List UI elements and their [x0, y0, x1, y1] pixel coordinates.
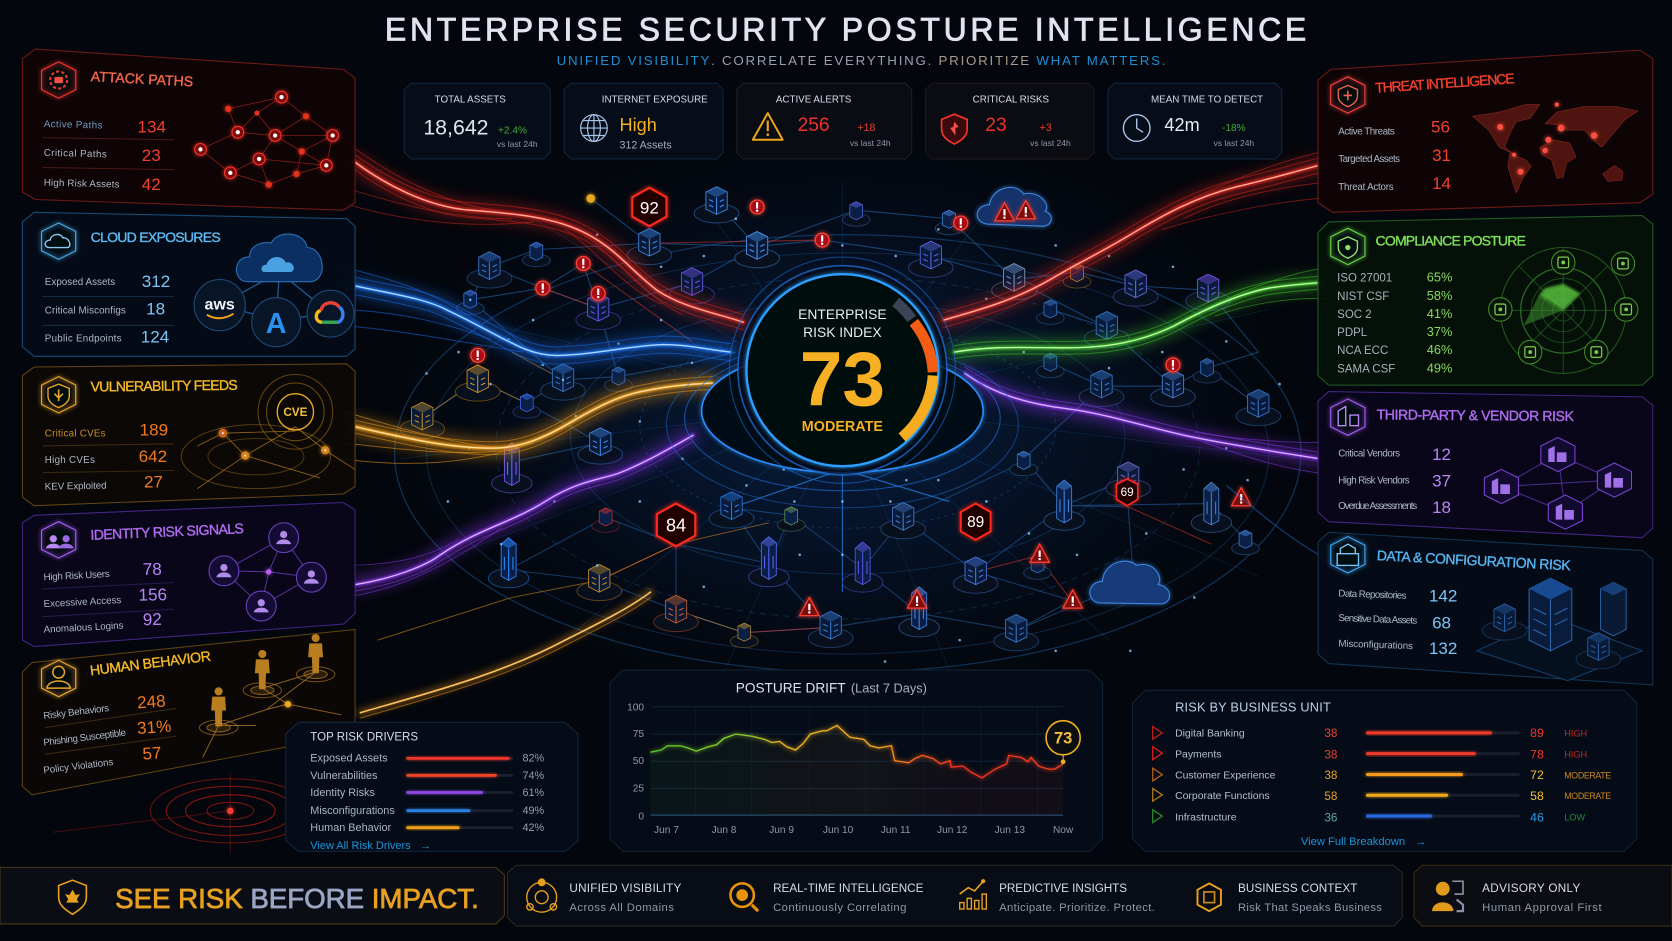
metrics: Threat Actors: [1338, 182, 1394, 193]
compliance rows: PDPL: [1337, 327, 1368, 339]
score 92: 92: [640, 198, 659, 217]
capability: predictive insights: PREDICTIVE INSIGHTS: [999, 882, 1127, 895]
risk score hexagons: [632, 188, 1138, 546]
KPI: total assets: 18,642: [423, 115, 489, 139]
grid: [650, 706, 1063, 815]
metrics: 31%: [137, 717, 172, 738]
icon: shield: [1331, 228, 1365, 265]
row: customer experience: MODERATE: [1564, 770, 1611, 780]
network platform rings: [395, 181, 1301, 672]
capability: predictive insights: [960, 879, 1155, 914]
icon: users: [42, 522, 76, 558]
row: infrastructure: Infrastructure: [1175, 812, 1237, 823]
panel: posture drift chart: [610, 670, 1103, 851]
y axis labels: 100: [627, 703, 644, 714]
x axis labels: Jun 11: [881, 825, 911, 836]
row: digital banking: HIGH: [1564, 729, 1587, 739]
row: infrastructure: [1153, 810, 1586, 825]
slogan: SEE RISK BEFORE IMPACT.: [115, 883, 479, 914]
x axis labels: [654, 825, 1074, 836]
metrics: Policy Violations: [43, 757, 114, 776]
metrics: 37: [1432, 471, 1451, 491]
human behavior stream connector: [360, 592, 650, 718]
icon: main cloud: [236, 234, 322, 282]
x axis labels: Jun 13: [995, 825, 1025, 836]
metrics: High Risk Vendors: [1338, 475, 1410, 486]
capability: unified visibility: [527, 879, 682, 914]
x axis labels: Jun 10: [823, 825, 854, 836]
KPI: mean time to detect: vs last 24h: [1213, 138, 1254, 148]
metrics: High CVEs: [45, 455, 95, 466]
icon: azure: A: [266, 308, 287, 340]
row: digital banking: Digital Banking: [1175, 729, 1245, 740]
CVE radar graphic: [181, 374, 355, 489]
icon: attack target: [42, 62, 76, 98]
user node: [246, 591, 276, 621]
x axis labels: Jun 12: [937, 825, 968, 836]
y axis labels: 25: [633, 784, 644, 795]
metrics: 42: [142, 175, 161, 194]
icon: aws: [194, 280, 245, 331]
row: vulnerabilities: 74%: [523, 770, 545, 782]
capability: unified visibility: Across All Domains: [569, 902, 674, 914]
KPI: active alerts: 256: [798, 115, 830, 136]
row: payments: Payments: [1175, 749, 1222, 760]
faint blue data connector: [1226, 485, 1319, 555]
radar chart: [1489, 248, 1638, 373]
compliance rows: 41%: [1427, 306, 1452, 321]
compliance rows: SAMA CSF: [1337, 363, 1395, 375]
score 89: 89: [967, 514, 984, 531]
row: payments: 78: [1530, 748, 1544, 762]
metrics: [43, 691, 176, 776]
panel: compliance posture: [1318, 216, 1653, 385]
y axis labels: [627, 703, 644, 822]
row: corporate functions: 58: [1324, 790, 1338, 803]
metrics: 18: [146, 300, 165, 319]
row: payments: [1153, 747, 1587, 762]
score 92: [632, 188, 666, 226]
metrics: Risky Behaviors: [43, 703, 110, 722]
row: exposed assets: 82%: [523, 753, 545, 765]
central glow: [341, 96, 1344, 736]
row: payments: HIGH: [1564, 749, 1587, 759]
current score marker: 73: [1054, 729, 1072, 748]
row: human behavior: 42%: [523, 822, 545, 834]
heading: ATTACK PATHS: [90, 68, 194, 89]
KPI: mean time to detect: [1108, 83, 1282, 159]
KPI: total assets: [404, 83, 550, 159]
red radar floor graphic: [53, 773, 310, 854]
score 69: [1116, 479, 1138, 506]
metrics: Public Endpoints: [45, 333, 122, 344]
metrics: 78: [143, 560, 162, 579]
row: customer experience: 38: [1324, 769, 1338, 782]
metrics: 12: [1432, 445, 1451, 464]
metrics: [43, 272, 174, 346]
KPI: internet exposure: 312 Assets: [620, 139, 672, 151]
compliance rows: 65%: [1427, 270, 1452, 285]
metrics: 132: [1429, 639, 1457, 658]
KPI: total assets: vs last 24h: [497, 139, 538, 149]
capability: business context: Risk That Speaks Business: [1238, 902, 1382, 914]
icon: warning triangle: [753, 113, 783, 140]
green stream connector: [954, 267, 1333, 358]
metrics: Sensitive Data Assets: [1338, 613, 1417, 627]
compliance rows: 49%: [1427, 360, 1452, 375]
central risk index gauge: RISK INDEX: [803, 324, 882, 340]
compliance rows: 46%: [1427, 342, 1452, 357]
row: misconfigurations: [310, 805, 545, 817]
metrics: [43, 560, 174, 636]
gauge amber segment: [902, 376, 933, 437]
capability: business context: [1197, 882, 1382, 914]
heading: COMPLIANCE POSTURE: [1376, 232, 1526, 248]
y axis labels: 0: [638, 811, 644, 822]
row: corporate functions: 58: [1530, 789, 1544, 803]
row: misconfigurations: 49%: [523, 805, 545, 817]
row: infrastructure: 36: [1324, 812, 1337, 825]
link: View Full Breakdown: [1301, 836, 1405, 848]
row: corporate functions: Corporate Functions: [1175, 791, 1270, 802]
row: customer experience: 72: [1530, 768, 1544, 782]
identity graph: [209, 523, 326, 621]
subtitle: UNIFIED VISIBILITY. CORRELATE EVERYTHING. PRIORITIZE WHAT MATTERS.: [557, 53, 1165, 68]
attack network graph: [195, 91, 339, 188]
world map: [1473, 102, 1638, 193]
KPI: critical risks: +3: [1040, 122, 1052, 134]
metrics: High Risk Users: [43, 569, 110, 583]
figures graph: [199, 634, 341, 757]
metrics: 31: [1432, 146, 1451, 165]
gauge heading: ENTERPRISE: [798, 306, 887, 322]
icon: aws: aws: [205, 296, 235, 313]
row: identity risks: Identity Risks: [310, 787, 375, 799]
metrics: 68: [1432, 613, 1451, 632]
x axis labels: Jun 9: [769, 825, 794, 836]
row: identity risks: [310, 787, 545, 799]
KPI: internet exposure: INTERNET EXPOSURE: [602, 94, 708, 105]
panel: cloud exposures: [22, 212, 355, 356]
panel: human behavior: [22, 629, 355, 795]
metrics: 642: [139, 447, 167, 466]
metrics: Overdue Assessments: [1338, 501, 1417, 512]
network nodes: [400, 187, 1281, 651]
heading: DATA & CONFIGURATION RISK: [1376, 547, 1572, 573]
row: corporate functions: MODERATE: [1564, 791, 1611, 801]
vendor graph: [1484, 437, 1631, 529]
icon: unified: [527, 879, 557, 912]
link: →: [420, 840, 431, 852]
score 84: [657, 504, 695, 546]
gauge value: 73: [800, 336, 885, 422]
gauge status: MODERATE: [802, 419, 883, 435]
icon: magnifier: [730, 883, 758, 911]
bottom advisory panel: [1414, 865, 1672, 926]
metrics: 189: [140, 420, 168, 439]
KPI: active alerts: [737, 83, 912, 159]
row: customer experience: [1153, 768, 1611, 782]
compliance rows: NCA ECC: [1337, 345, 1388, 357]
compliance rows: 58%: [1427, 288, 1452, 303]
metrics: Phishing Susceptible: [43, 728, 127, 749]
user node: [269, 523, 299, 553]
heading: IDENTITY RISK SIGNALS: [90, 520, 244, 543]
heading: TOP RISK DRIVERS: [310, 731, 418, 743]
icon: cloud: [42, 223, 76, 259]
x axis labels: Jun 7: [654, 825, 679, 836]
metrics: Data Repositories: [1338, 588, 1407, 602]
network junction sparks: [427, 219, 1280, 661]
metrics: Targeted Assets: [1338, 154, 1400, 165]
metrics: Critical Paths: [44, 148, 107, 160]
metrics: 18: [1432, 498, 1451, 517]
metrics: 14: [1432, 174, 1451, 193]
score 84: 84: [666, 515, 686, 535]
metrics: 248: [137, 691, 166, 712]
row: payments: 38: [1324, 749, 1338, 762]
compliance rows: SOC 2: [1337, 309, 1372, 321]
posture line: [650, 725, 1063, 778]
KPI: internet exposure: [564, 83, 723, 159]
KPI: active alerts: vs last 24h: [850, 138, 891, 148]
metrics: [43, 117, 174, 194]
row: misconfigurations: Misconfigurations: [310, 805, 395, 817]
row: digital banking: [1153, 726, 1587, 740]
heading: CLOUD EXPOSURES: [91, 229, 221, 245]
central risk index gauge: [666, 257, 1018, 508]
bottom slogan panel: [0, 867, 504, 924]
red stream connectors: [341, 139, 1333, 330]
row: exposed assets: Exposed Assets: [310, 753, 388, 765]
panel: threat intelligence: [1318, 50, 1653, 212]
alert badges: [471, 194, 1251, 616]
metrics: Misconfigurations: [1338, 639, 1413, 652]
row: vulnerabilities: [310, 770, 545, 782]
compliance rows: [1337, 270, 1452, 375]
compliance rows: NIST CSF: [1337, 291, 1389, 303]
capability: real-time intelligence: [730, 882, 924, 914]
score 89: [961, 504, 991, 540]
x axis labels: Now: [1053, 825, 1074, 836]
capability: real-time intelligence: Continuously Correlating: [773, 902, 906, 914]
capability: business context: BUSINESS CONTEXT: [1238, 882, 1357, 895]
KPI: critical risks: vs last 24h: [1030, 138, 1071, 148]
bottom advisory panel: ADVISORY ONLY: [1482, 882, 1580, 895]
icon: shield: [1331, 77, 1365, 113]
row: human behavior: Human Behavior: [310, 822, 392, 834]
capability: predictive insights: Anticipate. Prioritize. Protect.: [999, 902, 1155, 914]
metrics: Anomalous Logins: [43, 620, 124, 636]
icon: person: [42, 660, 76, 697]
icon: cloud node large: [1090, 561, 1170, 604]
isometric data center: [1477, 578, 1642, 681]
metrics: 27: [144, 473, 163, 492]
icon: rising chart: [960, 879, 986, 909]
panel: third-party and vendor risk: [1318, 392, 1653, 538]
row: infrastructure: 46: [1530, 811, 1544, 825]
row: infrastructure: LOW: [1564, 812, 1586, 822]
heading: (Last 7 Days): [851, 680, 927, 695]
panel: attack paths: [22, 49, 355, 210]
row: corporate functions: [1153, 788, 1611, 803]
panel: identity risk signals: [22, 503, 355, 647]
user node: [296, 562, 326, 592]
heading: HUMAN BEHAVIOR: [89, 648, 212, 678]
link: View All Risk Drivers: [310, 840, 411, 852]
row: exposed assets: [310, 753, 545, 765]
CVE radar graphic: CVE: [283, 406, 308, 419]
icon: shield: [59, 880, 86, 914]
KPI: internet exposure: High: [620, 115, 657, 135]
icon: clock: [1123, 115, 1150, 141]
bottom capability strip: [508, 865, 1402, 926]
KPI: critical risks: CRITICAL RISKS: [973, 94, 1050, 105]
icon: shield: [942, 114, 967, 144]
panel: top risk drivers: [286, 722, 578, 852]
row: human behavior: [310, 822, 545, 834]
metrics: [1338, 445, 1451, 517]
metrics: 124: [141, 327, 169, 346]
metrics: Active Paths: [44, 119, 103, 131]
icon: advisor: [1432, 881, 1463, 911]
metrics: 56: [1431, 117, 1450, 136]
metrics: 23: [142, 146, 161, 165]
network links: [377, 198, 1258, 640]
title: ENTERPRISE SECURITY POSTURE INTELLIGENCE: [385, 12, 1306, 48]
link: →: [1415, 836, 1426, 848]
panel: risk by business unit: [1132, 690, 1637, 851]
current score marker: [1046, 721, 1080, 764]
KPI: critical risks: [926, 83, 1094, 159]
metrics: 312: [142, 272, 170, 291]
icon: azure: [252, 298, 301, 347]
y axis labels: 50: [633, 756, 644, 767]
capability: unified visibility: UNIFIED VISIBILITY: [569, 882, 682, 895]
gauge track segment: [896, 302, 912, 319]
heading: VULNERABILITY FEEDS: [90, 377, 238, 395]
heading: THIRD-PARTY & VENDOR RISK: [1377, 406, 1575, 424]
KPI: critical risks: 23: [985, 115, 1007, 136]
chart area fill: [650, 725, 1063, 815]
metrics: [43, 420, 174, 493]
metrics: KEV Exploited: [45, 481, 107, 493]
x axis labels: Jun 8: [712, 825, 737, 836]
KPI: total assets: TOTAL ASSETS: [435, 94, 506, 105]
metrics: Critical Vendors: [1338, 449, 1400, 460]
icon: cloud node with alerts: [977, 187, 1051, 226]
row: identity risks: 61%: [523, 787, 545, 799]
panel: data and configuration risk: [1318, 532, 1653, 685]
metrics: High Risk Assets: [44, 178, 120, 191]
compliance rows: ISO 27001: [1337, 273, 1392, 285]
bottom advisory panel: Human Approval First: [1482, 902, 1602, 914]
metrics: 134: [138, 117, 166, 136]
cloud provider graph: [194, 234, 354, 347]
compliance rows: 37%: [1427, 324, 1452, 339]
blue stream connector: [341, 267, 730, 364]
user node: [209, 556, 239, 586]
panel: vulnerability feeds: [22, 364, 355, 506]
y axis labels: 75: [633, 729, 644, 740]
metrics: Exposed Assets: [45, 277, 115, 288]
metrics: Excessive Access: [43, 595, 122, 610]
heading: RISK BY BUSINESS UNIT: [1175, 700, 1331, 715]
KPI: total assets: +2.4%: [498, 125, 527, 136]
icon: hex context: [1197, 883, 1221, 911]
metrics: 142: [1429, 587, 1457, 606]
icon: data: [1331, 537, 1365, 573]
metrics: Critical Misconfigs: [45, 306, 126, 317]
KPI: mean time to detect: -18%: [1222, 123, 1246, 134]
KPI: mean time to detect: 42m: [1164, 115, 1200, 135]
capability: real-time intelligence: REAL-TIME INTELLIGENCE: [773, 882, 924, 895]
metrics: 156: [138, 585, 167, 605]
row: vulnerabilities: Vulnerabilities: [310, 770, 378, 782]
metrics: 57: [142, 743, 162, 764]
metrics: [1338, 117, 1451, 193]
KPI: mean time to detect: MEAN TIME TO DETECT: [1151, 94, 1263, 105]
heading: POSTURE DRIFT: [736, 680, 846, 695]
row: digital banking: 89: [1530, 726, 1544, 740]
KPI: active alerts: ACTIVE ALERTS: [776, 94, 852, 105]
metrics: [1338, 587, 1457, 658]
icon: shield: [42, 377, 76, 413]
icon: buildings: [1331, 399, 1365, 435]
row: digital banking: 38: [1324, 727, 1338, 740]
score 69: 69: [1121, 486, 1134, 499]
heading: THREAT INTELLIGENCE: [1375, 70, 1515, 96]
KPI: active alerts: +18: [857, 122, 875, 134]
metrics: Critical CVEs: [45, 428, 106, 439]
metrics: 92: [143, 610, 162, 629]
icon: globe: [581, 115, 607, 141]
metrics: Active Threats: [1338, 126, 1395, 137]
row: customer experience: Customer Experience: [1175, 770, 1276, 781]
gauge orange segment: [914, 322, 933, 372]
purple stream connectors: [341, 367, 1333, 597]
icon: google cloud: [307, 290, 354, 337]
orange stream connector: [341, 377, 712, 463]
